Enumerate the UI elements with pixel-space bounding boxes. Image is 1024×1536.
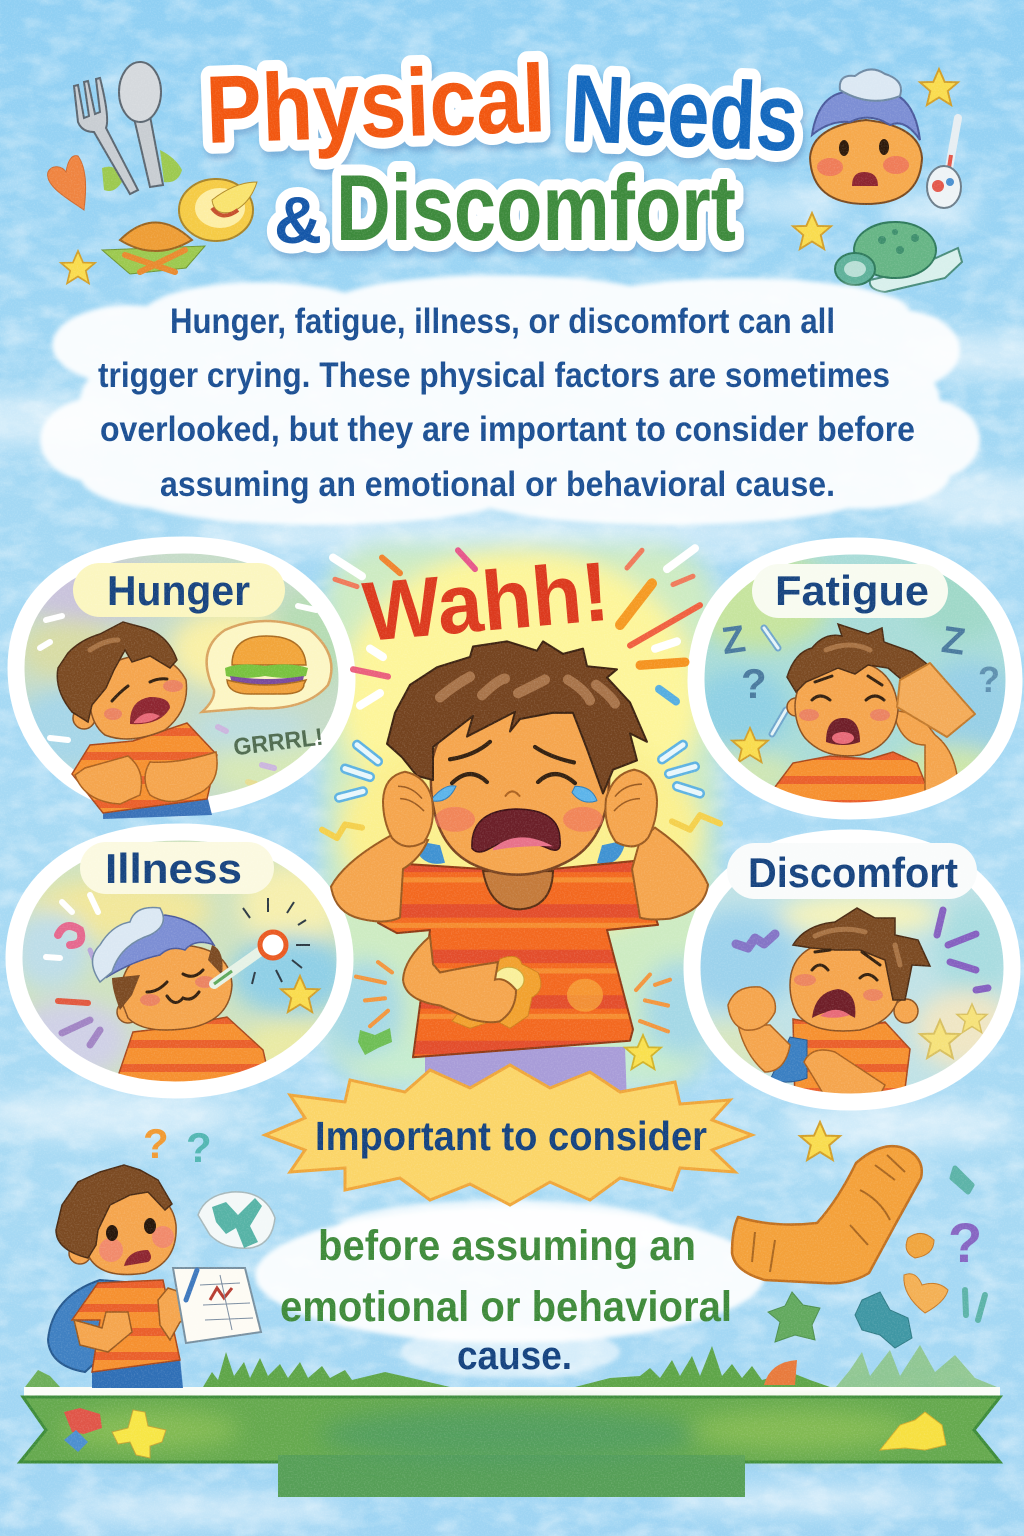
arm and hands — [74, 1288, 196, 1352]
ribbon lower tab — [278, 1455, 745, 1497]
fatigue star — [732, 728, 768, 762]
ribbon puzzle pieces — [64, 1408, 946, 1458]
illness label: Illness — [105, 845, 242, 892]
hair — [56, 1165, 172, 1258]
illness confetti — [46, 895, 100, 1045]
closing message: before assuming an — [318, 1222, 696, 1270]
icon: question marks — [143, 1120, 212, 1171]
intro text: assuming an emotional or behavioral cause. — [160, 465, 835, 504]
shirt — [72, 1280, 180, 1372]
intro text: trigger crying. These physical factors are sometimes — [98, 356, 890, 395]
ribbon shading — [60, 1407, 910, 1463]
ribbon main — [20, 1397, 1000, 1462]
icon: fork and spoon — [74, 62, 182, 194]
icon: torn paper puzzle — [198, 1192, 275, 1248]
icon: sandwich — [102, 222, 205, 274]
wahh exclamation: Wahh! — [359, 544, 613, 659]
green puzzle and star near child — [358, 1028, 661, 1069]
central crying child — [331, 641, 708, 1104]
icon: decorative shapes right — [764, 1122, 985, 1385]
central glow — [325, 545, 718, 1085]
arms — [331, 828, 708, 922]
icon: question marks: ? — [143, 1120, 169, 1167]
discomfort panel border — [692, 838, 1012, 1102]
intro text — [98, 302, 915, 504]
closing message: emotional or behavioral — [280, 1283, 732, 1331]
icon: stars top right — [793, 69, 958, 249]
sleepy letters — [722, 625, 998, 698]
face — [431, 700, 609, 875]
ribbon banner — [20, 1397, 1000, 1497]
white ground stripe — [24, 1387, 1000, 1397]
illness label — [80, 842, 274, 894]
fatigue panel border — [696, 546, 1014, 811]
hunger child — [57, 622, 217, 819]
closing message — [280, 1222, 732, 1378]
icon: thermometer — [214, 898, 310, 984]
hunger confetti — [40, 606, 316, 784]
icon: decorative shapes right: ? — [948, 1211, 982, 1274]
tears — [432, 786, 597, 802]
icon: bandaged foot — [732, 1146, 922, 1283]
pants — [425, 1047, 627, 1104]
icon: heart — [48, 156, 86, 210]
speech bubble with burger — [202, 621, 331, 712]
trousers — [92, 1358, 183, 1388]
fatigue child — [772, 624, 958, 815]
illness child — [92, 908, 272, 1092]
icon: star left — [61, 251, 95, 283]
icon: pillow — [897, 663, 975, 737]
starburst callout: Important to consider — [315, 1113, 707, 1159]
face — [99, 1218, 174, 1266]
shirt highlight — [567, 979, 603, 1012]
title word: Needs: Needs — [568, 55, 801, 172]
growl text: GRRRL! — [232, 724, 325, 761]
sleepy letters: ? — [978, 659, 1000, 700]
nose — [505, 791, 520, 797]
fatigue label: Fatigue — [775, 567, 929, 614]
bottom child with backpack — [48, 1165, 261, 1388]
sleepy letters: ? — [741, 660, 767, 707]
grass tufts — [25, 1345, 997, 1387]
panel: illness — [5, 825, 355, 1095]
hands on head — [383, 770, 657, 846]
panel: hunger — [10, 540, 360, 820]
orange splat and ball — [452, 956, 541, 1028]
hand on belly — [403, 936, 516, 1022]
sleepy letters: Z — [939, 619, 968, 664]
backpack — [48, 1280, 125, 1372]
fatigue droplets — [764, 628, 786, 734]
illness panel border — [14, 832, 345, 1090]
sleepy letters: Z — [719, 618, 748, 663]
icon: plate with food — [179, 179, 257, 241]
ear — [69, 1242, 91, 1264]
panel: fatigue — [680, 540, 1020, 820]
title word: Discomfort: Discomfort — [336, 155, 736, 260]
notebook — [173, 1268, 261, 1343]
mouth — [472, 809, 560, 852]
head — [85, 1187, 176, 1275]
shirt — [378, 861, 658, 1057]
icon: question marks: ? — [186, 1124, 212, 1171]
discomfort accents — [736, 910, 988, 990]
burst lines around child — [322, 548, 720, 1031]
intro cloud panel — [40, 275, 980, 525]
discomfort label: Discomfort — [748, 849, 958, 896]
panel: discomfort — [680, 830, 1020, 1110]
title — [204, 45, 801, 260]
fatigue label — [752, 564, 948, 618]
closing message: cause. — [457, 1334, 572, 1378]
cheeks — [435, 807, 603, 832]
starburst callout — [265, 1065, 752, 1205]
hunger panel border — [16, 545, 347, 808]
discomfort stars — [920, 1004, 987, 1058]
icon: thermometer top right — [927, 118, 961, 208]
title ampersand: & — [274, 183, 322, 257]
hunger label — [73, 563, 285, 617]
icon: hot water bottle — [835, 222, 962, 292]
intro text: overlooked, but they are important to consider before — [100, 410, 915, 449]
discomfort child — [728, 908, 930, 1105]
title word: Physical: Physical — [204, 45, 548, 164]
hunger label: Hunger — [107, 567, 250, 614]
crying eyes and brows — [450, 742, 575, 783]
icon: sick child head — [810, 69, 922, 204]
lower text cloud — [255, 1200, 765, 1378]
hair — [387, 641, 647, 793]
neck — [483, 871, 553, 909]
blue collar behind chin — [412, 840, 626, 864]
illness star — [281, 976, 319, 1012]
intro text: Hunger, fatigue, illness, or discomfort can all — [170, 302, 835, 341]
